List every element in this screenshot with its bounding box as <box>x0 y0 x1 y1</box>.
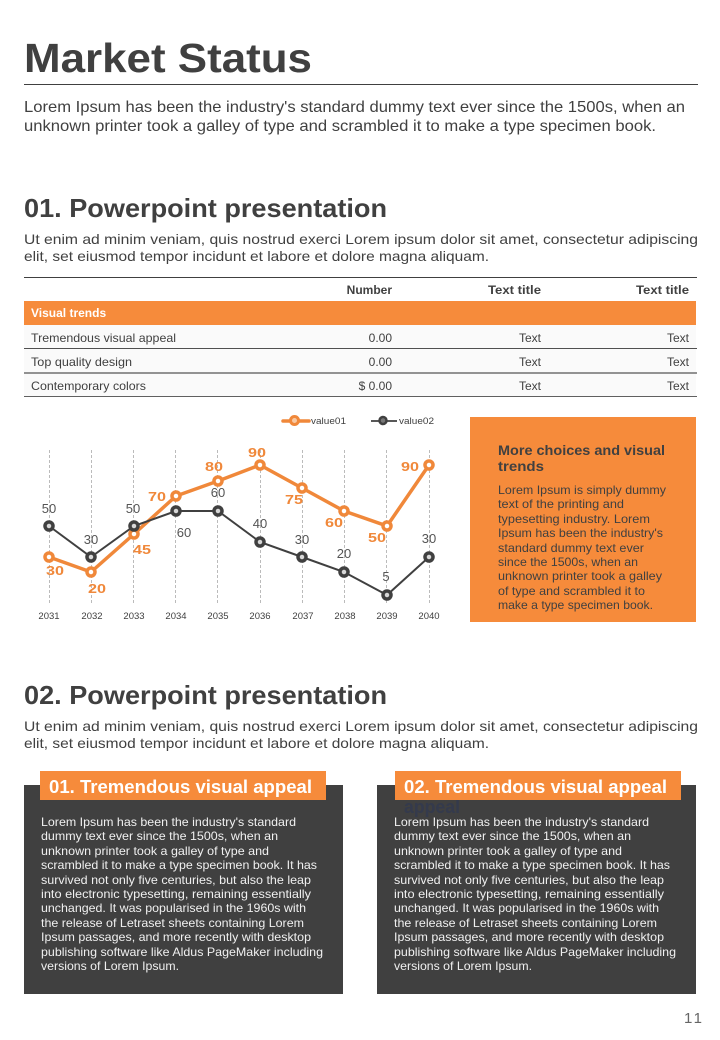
card 02 body: scrambled it to make a type specimen book. It has <box>394 858 670 872</box>
x axis years: 2038 <box>334 611 356 622</box>
intro text: Lorem Ipsum has been the industry's standard dummy text ever since the 1500s, when an <box>24 99 685 116</box>
card 02 body <box>394 815 676 973</box>
card 01 body: into electronic typesetting, remaining essentially <box>41 887 311 901</box>
x axis years: 2039 <box>376 611 398 622</box>
card 02 body: publishing software like Aldus PageMaker including <box>394 945 676 959</box>
card 01 body: the release of Letraset sheets containing Lorem <box>41 916 304 930</box>
value02 labels: 20 <box>337 546 351 561</box>
card 02 body: into electronic typesetting, remaining essentially <box>394 887 664 901</box>
card 01 body: unchanged. It was popularised in the 1960s with <box>41 901 306 915</box>
x axis years <box>38 611 440 622</box>
card 02 tab: 02. Tremendous visual appeal <box>404 777 667 797</box>
table row 3 <box>31 379 690 393</box>
value02 labels: 5 <box>382 569 390 584</box>
x axis years: 2036 <box>249 611 271 622</box>
card 02 body: unknown printer took a galley of type and <box>394 844 622 858</box>
x axis years: 2040 <box>418 611 440 622</box>
table row 2: Text <box>519 355 542 369</box>
section 02 text <box>24 718 698 751</box>
card 01 body: Ipsum passages, and more recently with desktop <box>41 930 311 944</box>
card 02 body: versions of Lorem Ipsum. <box>394 959 532 973</box>
value02 labels: 30 <box>84 532 98 547</box>
table row 2: Top quality design <box>31 355 132 369</box>
x axis years: 2037 <box>292 611 314 622</box>
table <box>24 278 697 397</box>
x axis years: 2033 <box>123 611 145 622</box>
card 01 body <box>41 815 323 973</box>
callout body: text of the printing and <box>498 497 624 511</box>
value02 labels: 30 <box>295 532 309 547</box>
section 02 text: elit, set eiusmod tempor incidunt et labore et dolore magna aliquam. <box>24 735 489 751</box>
value01 labels: 45 <box>133 543 151 557</box>
intro text: unknown printer took a galley of type and scrambled it to make a type specimen book. <box>24 118 656 135</box>
section 02 text: Ut enim ad minim veniam, quis nostrud exerci Lorem ipsum dolor sit amet, consectetur adipiscing <box>24 718 698 734</box>
value01 labels: 90 <box>401 460 419 474</box>
x axis years: 2034 <box>165 611 187 622</box>
callout heading: trends <box>498 458 544 474</box>
callout body: since the 1500s, when an <box>498 555 638 569</box>
value01 labels: 50 <box>368 531 386 545</box>
card 02 tab <box>395 771 681 800</box>
table header: Number <box>347 283 392 297</box>
value01 labels: 90 <box>248 446 266 460</box>
table header: Text title <box>636 283 689 297</box>
series value01 <box>45 461 433 576</box>
value01 labels: 60 <box>325 516 343 530</box>
card 02 body: unchanged. It was popularised in the 1960s with <box>394 901 659 915</box>
table row 3: Contemporary colors <box>31 379 146 393</box>
value01 labels: 75 <box>285 493 303 507</box>
table row 1: Text <box>519 331 542 345</box>
table row 3: Text <box>667 379 690 393</box>
legend <box>283 416 434 427</box>
card 01 body: dummy text ever since the 1500s, when an <box>41 829 278 843</box>
x axis years: 2032 <box>81 611 103 622</box>
value02 labels <box>42 485 436 584</box>
card 02 body: survived not only five centuries, but also the leap <box>394 873 664 887</box>
value01 labels: 20 <box>88 582 106 596</box>
table row 1: Tremendous visual appeal <box>31 331 176 345</box>
table row 3: Text <box>519 379 542 393</box>
section heading 02: 02. Powerpoint presentation <box>24 680 387 710</box>
line chart <box>38 416 440 622</box>
callout body: make a type specimen book. <box>498 598 653 612</box>
callout heading <box>498 442 665 474</box>
card 01 tab <box>40 771 326 800</box>
x axis years: 2031 <box>38 611 60 622</box>
callout body: Ipsum has been the industry's <box>498 526 663 540</box>
card 02 body: the release of Letraset sheets containing Lorem <box>394 916 657 930</box>
table band: visual trends <box>24 301 696 325</box>
value01 labels: 80 <box>205 460 223 474</box>
callout body <box>498 483 666 612</box>
table band: visual trends: Visual trends <box>31 306 106 320</box>
callout body: of type and scrambled it to <box>498 584 645 598</box>
legend: value02 <box>399 416 434 427</box>
table row 3: $ 0.00 <box>359 379 392 393</box>
callout body: standard dummy text ever <box>498 541 644 555</box>
card 02 ghost word: appeal <box>404 797 460 817</box>
callout: more choices <box>470 417 696 622</box>
card 02 body: Ipsum passages, and more recently with desktop <box>394 930 664 944</box>
callout body: unknown printer took a galley <box>498 569 662 583</box>
value02 labels: 60 <box>177 525 191 540</box>
section 01 text: Ut enim ad minim veniam, quis nostrud exerci Lorem ipsum dolor sit amet, consectetur adipiscing <box>24 231 698 247</box>
value02 labels: 40 <box>253 516 267 531</box>
title: Market Status <box>24 35 312 81</box>
table header: Text title <box>488 283 541 297</box>
section 01 text: elit, set eiusmod tempor incidunt et labore et dolore magna aliquam. <box>24 248 489 264</box>
card 01 body: versions of Lorem Ipsum. <box>41 959 179 973</box>
intro text <box>24 99 685 135</box>
table row 2: 0.00 <box>369 355 392 369</box>
card 02 body: Lorem Ipsum has been the industry's standard <box>394 815 649 829</box>
card 01 tab: 01. Tremendous visual appeal <box>49 777 312 797</box>
card 01 body: Lorem Ipsum has been the industry's standard <box>41 815 296 829</box>
table row 1: Text <box>667 331 690 345</box>
value02 labels: 50 <box>42 501 56 516</box>
panel: card 01 <box>24 771 343 994</box>
card 01 body: publishing software like Aldus PageMaker including <box>41 945 323 959</box>
card 01 body: survived not only five centuries, but also the leap <box>41 873 311 887</box>
callout body: typesetting industry. Lorem <box>498 512 650 526</box>
table header <box>347 283 689 297</box>
value02 labels: 60 <box>211 485 225 500</box>
table row 2 <box>31 355 690 369</box>
callout body: Lorem Ipsum is simply dummy <box>498 483 666 497</box>
section heading 01: 01. Powerpoint presentation <box>24 193 387 223</box>
card 01 body: unknown printer took a galley of type and <box>41 844 269 858</box>
page number: 11 <box>684 1010 702 1027</box>
value01 labels: 70 <box>148 490 166 504</box>
table row 1 <box>31 331 690 345</box>
x axis years: 2035 <box>207 611 229 622</box>
value02 labels: 50 <box>126 501 140 516</box>
card 01 body: scrambled it to make a type specimen book. It has <box>41 858 317 872</box>
callout heading: More choices and visual <box>498 442 665 458</box>
value01 labels <box>46 446 419 596</box>
panel: card 02 <box>377 771 696 994</box>
table row 1: 0.00 <box>369 331 392 345</box>
card 02 body: dummy text ever since the 1500s, when an <box>394 829 631 843</box>
section 01 text <box>24 231 698 264</box>
value02 labels: 30 <box>422 531 436 546</box>
value01 labels: 30 <box>46 564 64 578</box>
legend: value01 <box>311 416 346 427</box>
series value02 <box>45 507 433 599</box>
table row 2: Text <box>667 355 690 369</box>
